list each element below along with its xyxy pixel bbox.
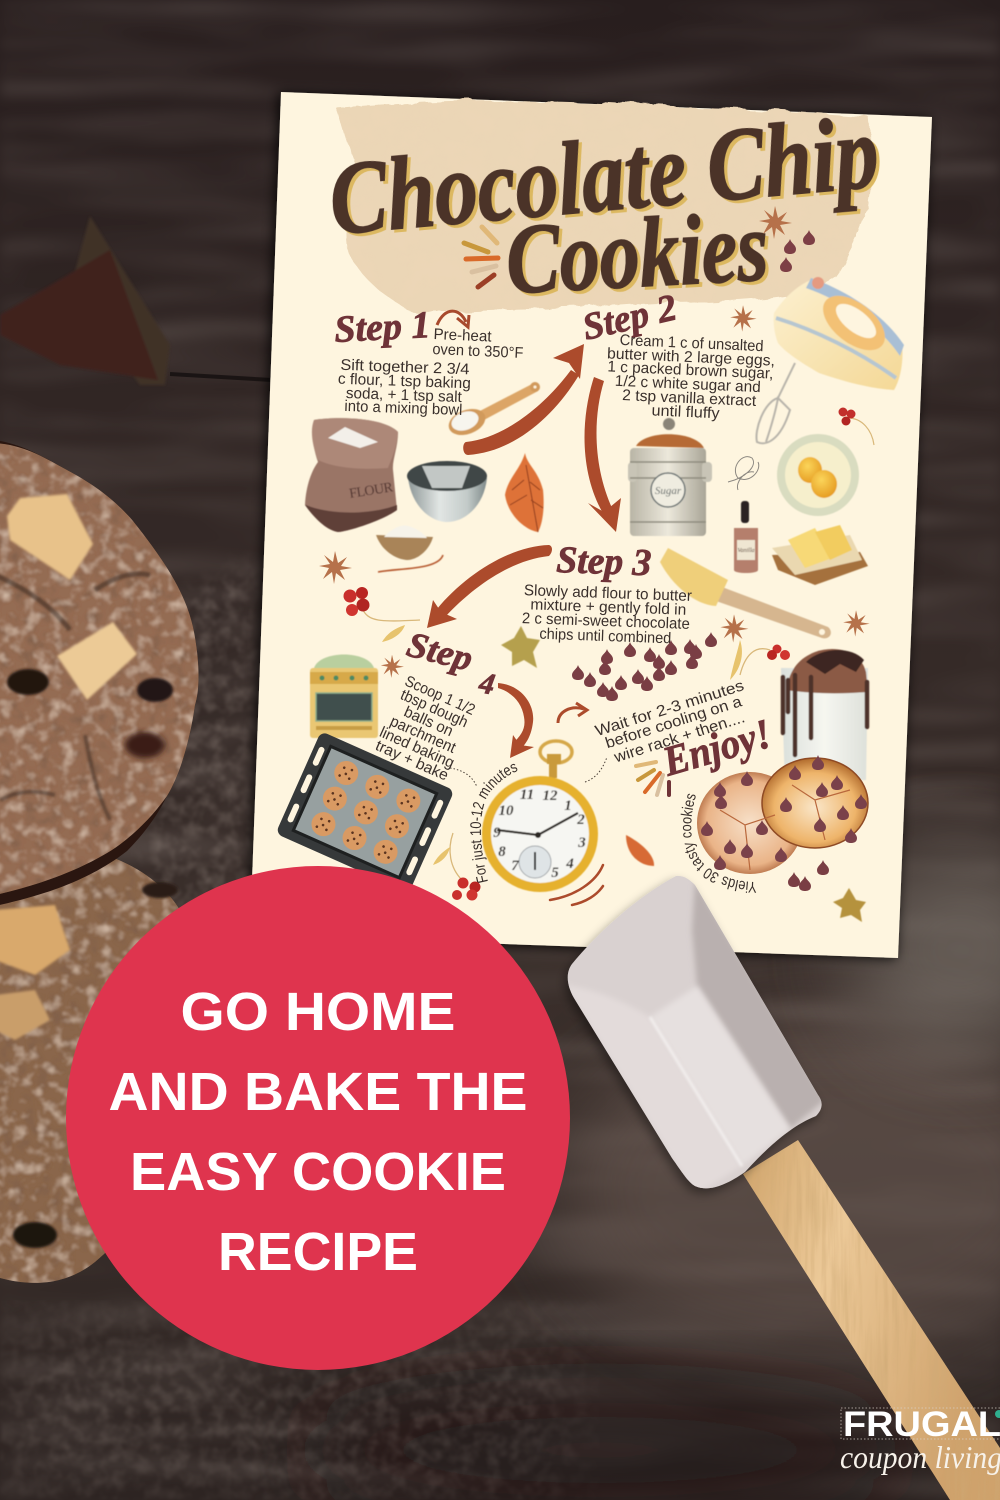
cream text: 1 c packed brown sugar, <box>607 358 774 383</box>
fold text: 2 c semi-sweet chocolate <box>522 610 690 633</box>
eggs in bowl <box>777 434 859 516</box>
cooling text <box>593 677 747 767</box>
oven <box>310 654 378 738</box>
watch numerals: 9 <box>493 825 501 841</box>
sugar jar <box>628 418 712 536</box>
red circle badge: EASY COOKIE <box>130 1142 506 1202</box>
flour label: FLOUR <box>348 480 395 502</box>
autumn leaf small <box>626 835 654 866</box>
cream text: 2 tsp vanilla extract <box>622 387 757 410</box>
wooden spoon with flour <box>445 382 540 440</box>
flour sack <box>305 418 398 532</box>
arrow: preheat <box>437 311 469 327</box>
small flour bowl <box>376 525 443 572</box>
watch numerals: 2 <box>576 812 585 828</box>
pocket watch <box>482 741 598 892</box>
maple leaf center <box>501 626 540 668</box>
scoop text <box>373 673 478 785</box>
sift text: Sift together 2 3/4 <box>340 357 470 378</box>
burlap cloth under cookies <box>0 540 600 1500</box>
star anise chips <box>720 614 748 642</box>
preheat text: oven to 350°F <box>432 341 524 362</box>
cookie white chocolate chunk top <box>7 494 93 580</box>
arrow: step 1 to 2 <box>463 344 584 455</box>
red circle badge: GO HOME <box>180 982 456 1042</box>
mixer whisk <box>756 363 795 443</box>
scoop text: parchment <box>387 713 459 757</box>
spatula head <box>565 876 825 1195</box>
step 1: Step 1 <box>333 304 431 351</box>
hand mixer <box>756 277 904 443</box>
title burst lines <box>464 227 498 287</box>
red circle badge: AND BAKE THE <box>108 1062 528 1122</box>
main cookie, upper left <box>0 440 199 906</box>
step 2 <box>579 286 776 425</box>
watch numerals: 1 <box>564 798 572 814</box>
brand logo: FRUGAL <box>843 1405 1000 1444</box>
brand logo <box>840 1405 1000 1475</box>
berries right of chips <box>730 640 790 680</box>
second cookie, lower left <box>0 840 197 1283</box>
vanilla bottle <box>734 501 758 573</box>
maple leaf corner <box>833 888 866 922</box>
star anise right <box>843 610 870 637</box>
sift text: into a mixing bowl <box>344 398 463 419</box>
berries near mixer <box>838 408 874 445</box>
scoop text: Scoop 1 1/2 <box>402 673 478 719</box>
cream text: butter with 2 large eggs, <box>607 345 775 370</box>
autumn leaf <box>505 453 544 532</box>
star anise step 2 <box>730 305 757 332</box>
preheat text: Pre-heat <box>433 326 493 346</box>
watch numerals: 8 <box>498 844 506 860</box>
main title: Cookies <box>503 190 771 315</box>
step 4: 4 <box>476 666 497 701</box>
chocolate chips by title <box>780 230 815 272</box>
baking tray with cookies <box>276 731 454 893</box>
cream text: Cream 1 c of unsalted <box>619 332 764 355</box>
watch motion marks <box>550 865 603 905</box>
sift text: soda, + 1 tsp salt <box>346 385 463 406</box>
cooling text: before cooling on a <box>603 693 744 752</box>
main title: Chocolate Chip <box>325 94 883 257</box>
scoop text: balls on <box>401 704 456 740</box>
step 4 <box>373 624 497 785</box>
cooling text: Wait for 2-3 minutes <box>593 677 746 740</box>
cream text <box>604 331 776 425</box>
butter on board <box>772 525 868 585</box>
cooling text: wire rack + then.... <box>611 709 747 767</box>
red berries left <box>344 587 420 642</box>
scoop text: tray + bake <box>373 737 451 785</box>
sift text <box>337 357 472 419</box>
sift text: c flour, 1 tsp baking <box>338 371 471 392</box>
watch numerals: 11 <box>520 787 534 803</box>
loose chips near cookies <box>788 860 829 891</box>
cream text: 1/2 c white sugar and <box>615 373 761 396</box>
step 3: Step 3 <box>556 539 652 584</box>
finished cookies <box>697 755 868 874</box>
sugar label: Sugar <box>655 485 682 497</box>
fold text: Slowly add flour to butter <box>524 582 692 605</box>
star anise title <box>759 206 792 239</box>
arrow: step 4 to watch <box>498 683 534 758</box>
star anise oven side <box>381 655 404 678</box>
step 2: Step 2 <box>579 286 681 349</box>
dark chocolate chunk in background <box>0 216 170 385</box>
arrow: watch to cooling <box>558 703 587 723</box>
metal mixing bowl <box>407 461 487 522</box>
step 3 <box>521 539 692 648</box>
glass of milk with chocolate <box>781 649 868 785</box>
watch numerals: 4 <box>565 856 574 872</box>
fold text <box>521 582 692 648</box>
fold text: mixture + gently fold in <box>530 596 687 619</box>
watch numerals: 10 <box>498 803 514 819</box>
cookie white chocolate chunk middle <box>57 622 137 700</box>
whisk swirl <box>728 457 759 490</box>
watch numerals: 5 <box>551 865 559 881</box>
enjoy burst lines <box>636 762 669 795</box>
yields text: Yields 30 tasty cookies <box>680 794 756 893</box>
cream text: until fluffy <box>651 402 720 422</box>
chocolate chips pile <box>572 632 717 701</box>
red circle badge <box>66 866 570 1370</box>
timing text: For just 10-12 minutes <box>470 764 518 883</box>
main title <box>325 94 883 315</box>
dotted connector lines <box>450 757 607 787</box>
watch numerals: 7 <box>511 858 519 874</box>
watch numerals <box>493 787 586 881</box>
star anise left <box>319 551 352 584</box>
scoop text: tbsp dough <box>398 686 470 731</box>
step 1 <box>333 304 524 419</box>
scoop text: lined baking <box>377 724 457 772</box>
spatula handle <box>743 1140 1000 1500</box>
arrow: step 3 to 4 <box>427 545 552 628</box>
watch numerals: 12 <box>542 788 558 804</box>
vanilla label: Vanilla <box>737 548 755 554</box>
step 4: Step <box>403 624 477 679</box>
watercolor title wash <box>336 100 870 312</box>
red circle badge: RECIPE <box>218 1222 418 1282</box>
enjoy heading: Enjoy! <box>657 711 776 786</box>
berries under watch <box>433 833 480 900</box>
white silicone spatula with wooden handle <box>565 876 1000 1500</box>
yellow rubber spatula <box>660 548 831 638</box>
fold text: chips until combined <box>539 626 672 647</box>
arrow: step 2 to 3 <box>585 377 621 532</box>
preheat text <box>432 326 524 362</box>
recipe card <box>244 88 935 966</box>
watch numerals: 3 <box>577 835 586 851</box>
